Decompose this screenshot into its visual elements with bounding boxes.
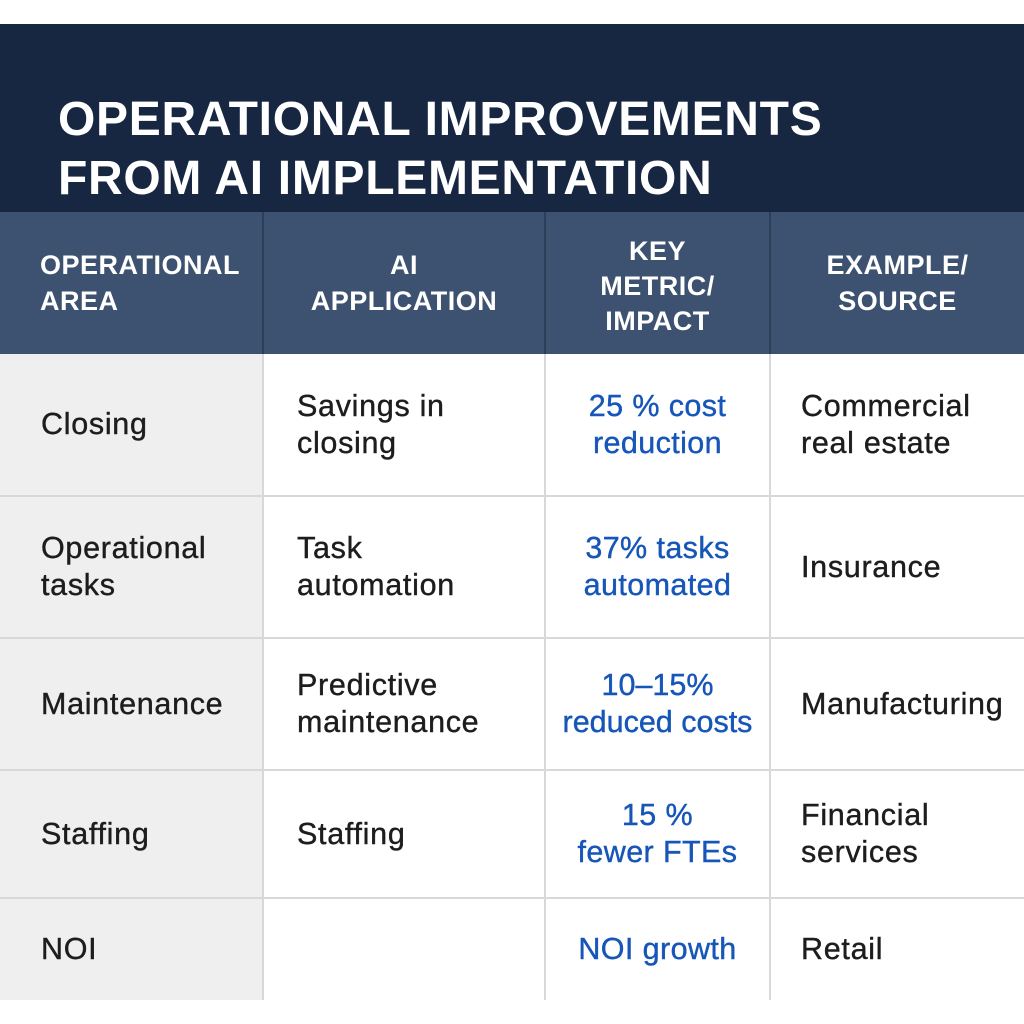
header: operational area [0,212,264,354]
row: staffing: Staffing [41,816,149,850]
header: operational area: OPERATIONAL [40,250,240,280]
header: key metric: METRIC/ [600,270,715,300]
row: operational tasks: Operational [41,531,206,565]
row: closing: reduction [593,426,722,460]
header: ai application: APPLICATION [311,286,497,316]
header: example: SOURCE [838,286,957,316]
title [0,24,1024,212]
header: key metric: IMPACT [605,306,710,336]
header: example: EXAMPLE/ [826,250,969,280]
row: staffing: 15 % [622,798,693,832]
row: maintenance: Manufacturing [801,686,1003,720]
row: closing: real estate [801,426,951,460]
header: ai application: AI [390,250,418,280]
row: operational tasks: Insurance [801,550,941,584]
row: operational tasks: automated [584,568,731,602]
row: noi: Retail [801,932,883,966]
header: key metric [546,212,771,354]
row: closing: 25 % cost [589,388,726,422]
row: staffing: fewer FTEs [578,835,737,869]
row: maintenance: reduced costs [563,705,752,739]
header: operational area: AREA [40,286,119,316]
row: maintenance: Predictive [297,668,438,702]
row: staffing: Staffing [297,816,405,850]
row: maintenance: maintenance [297,705,479,739]
title: FROM AI IMPLEMENTATION [58,152,712,205]
row: closing: Closing [41,407,148,441]
row: closing [0,354,1024,497]
row: maintenance [0,639,1024,771]
header row [0,212,1024,354]
row: maintenance: Maintenance [41,686,223,720]
row: operational tasks [0,497,1024,639]
row: operational tasks: 37% tasks [585,531,730,565]
row: operational tasks: tasks [41,568,116,602]
row: operational tasks: automation [297,568,455,602]
header: key metric: KEY [629,236,686,266]
row: maintenance: 10–15% [602,668,713,702]
row: closing: closing [297,426,397,460]
title: OPERATIONAL IMPROVEMENTS [58,93,822,146]
row: staffing: Financial [801,798,929,832]
row: operational tasks: Task [297,531,363,565]
row: closing: Savings in [297,388,445,422]
row: noi: NOI [41,932,97,966]
row: closing: Commercial [801,388,971,422]
row: noi: NOI growth [578,932,737,966]
header: example [771,212,1024,354]
row: staffing [0,771,1024,899]
row: noi [0,899,883,1000]
header: ai application [264,212,546,354]
row: staffing: services [801,835,918,869]
